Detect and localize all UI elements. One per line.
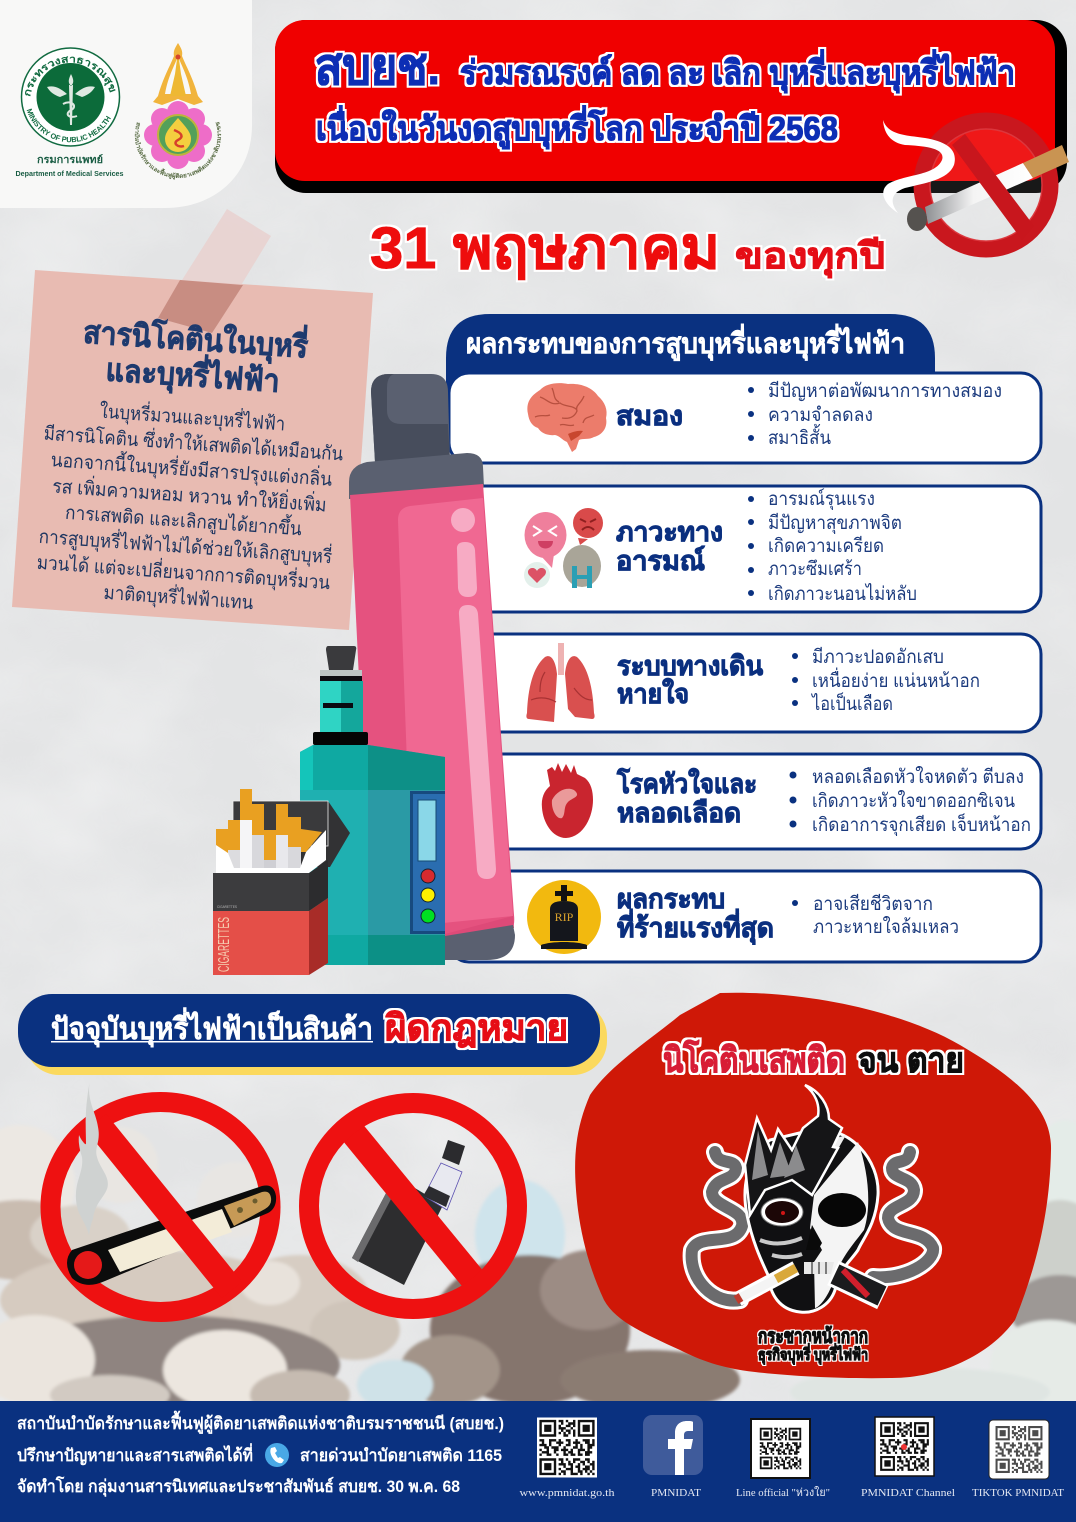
icon: no cigarette sign [50,1080,276,1312]
note body text: นอกจากนี้ในบุหรี่ยังมีสารปรุงแต่งกลิ่น [50,446,333,492]
list: emotion effects: เกิดความเครียด [768,535,884,557]
effects header tab: ผลกระทบของการสูบบุหรี่และบุหรี่ไฟฟ้า [466,323,905,361]
footer [0,1401,1076,1522]
smoke clouds [0,1120,1076,1420]
list: brain effects: สมาธิสั้น [768,424,831,449]
label: heart: โรคหัวใจและ [616,767,757,799]
label: severe: ที่ร้ายแรงที่สุด [617,908,774,945]
label: emotions [616,517,723,576]
title banner [275,20,1067,193]
logo: Ministry of Public Health: Department of Medical Services [16,171,124,178]
PMNIDAT Channel QR code: PMNIDAT Channel [861,1487,955,1499]
icon: no vape sign [309,1103,517,1309]
website QR code: www.pmnidat.go.th [520,1487,615,1499]
Line official QR code [736,1419,830,1499]
note heading: สารนิโคตินในบุหรี่ [82,310,310,366]
Facebook link [643,1415,703,1499]
warning heading: นิโคตินเสพติด [663,1039,845,1080]
warning heading [663,1039,964,1080]
title line 2: เนื่องในวันงดสูบบุหรี่โลก ประจำปี 2568 [316,105,838,150]
tape [158,209,271,333]
note body text: การสูบบุหรี่ไฟฟ้าไม่ได้ช่วยให้เลิกสูบบุหรี่ [38,523,333,569]
note body text: มวนได้ แต่จะเปลี่ยนจากการติดบุหรี่มวน [36,549,331,595]
card: most severe effect [449,871,1041,962]
title line 1: ร่วมรณรงค์ ลด ละ เลิก บุหรี่และบุหรี่ไฟฟ้า [460,49,1015,94]
list: heart effects: เกิดภาวะหัวใจขาดออกซิเจน [812,790,1015,812]
list: heart effects [790,766,1031,837]
panel: nicotine warning [575,993,1051,1378]
law banner: ปัจจุบันบุหรี่ไฟฟ้าเป็นสินค้า [51,1007,373,1048]
note body text: รส เพิ่มความหอม หวาน ทำให้ยิ่งเพิ่ม [51,472,328,517]
skull caption: ธุรกิจบุหรี่ บุหรี่ไฟฟ้า [758,1343,868,1365]
label: brain: สมอง [616,401,683,431]
website QR code [520,1418,615,1499]
footer contact text: สถาบันบำบัดรักษาและฟื้นฟูผู้ติดยาเสพติดแห่งชาติบรมราชชนนี (สบยช.) [17,1410,504,1435]
footer contact text [17,1410,504,1497]
icon: lungs [526,643,595,722]
list: severe effects [792,893,959,938]
illustration: cigarette pack [213,789,350,975]
card: emotions [449,486,1041,612]
TikTok QR code: TIKTOK PMNIDAT [972,1487,1064,1499]
left eye [761,1198,803,1226]
effects header tab [446,314,935,400]
label: emotions: ภาวะทาง [616,517,723,547]
title line 1 [315,39,1015,95]
date heading [370,216,885,281]
logo: Ministry of Public Health: กระทรวงสาธารณสุข [25,56,116,96]
list: emotion effects: เกิดภาวะนอนไม่หลับ [768,583,917,605]
smoke [692,1152,933,1301]
icon: RIP tombstone: RIP [555,910,574,924]
icon: brain [527,383,607,452]
logo: Ministry of Public Health: MINISTRY OF PUBLIC HEALTH [26,108,111,142]
illustration: cigarette pack: CIGARETTES [217,904,237,909]
note body text: ในบุหรี่มวนและบุหรี่ไฟฟ้า [99,398,286,436]
icon: emotion bubbles [524,508,603,588]
PMNIDAT Channel QR code [861,1417,955,1499]
skull head [745,1130,878,1312]
note body text: มาติดบุหรี่ไฟฟ้าแทน [103,579,254,615]
footer contact text: ปรึกษาปัญหายาและสารเสพติดได้ที่ [17,1443,253,1466]
note body text: การเสพติด และเลิกสูบได้ยากขึ้น [64,499,303,540]
law banner: ผิดกฎหมาย [385,1007,568,1048]
label: severe: ผลกระทบ [617,884,725,914]
title line 1: สบยช. [315,39,440,95]
label: heart [616,767,757,828]
footer contact text: สายด่วนบำบัดยาเสพติด 1165 [300,1446,502,1465]
card: heart and blood vessels [449,754,1041,849]
list: severe effects: ภาวะหายใจล้มเหลว [813,916,959,938]
list: emotion effects [748,488,917,605]
skull caption [758,1325,868,1365]
note heading: และบุหรี่ไฟฟ้า [105,347,281,401]
list: brain effects: ความจำลดลง [768,405,873,426]
Facebook link: PMNIDAT [651,1487,701,1499]
TikTok QR code [972,1420,1064,1499]
illustration: pink disposable vape [349,374,515,960]
law banner [18,994,607,1075]
label: respiratory: หายใจ [617,678,689,709]
Line official QR code: Line official "ห่วงใย" [736,1486,830,1499]
control panel [410,791,445,934]
hair [745,1085,842,1215]
panel: effects of smoking [446,314,1041,962]
list: severe effects: อาจเสียชีวิตจาก [813,893,933,915]
list: respiratory effects: ไอเป็นเลือด [810,691,893,715]
label: respiratory: ระบบทางเดิน [617,651,764,681]
cigarette [67,1185,276,1285]
list: respiratory effects: มีภาวะปอดอักเสบ [812,646,944,668]
label: heart: หลอดเลือด [617,798,741,828]
illustration: skull with smoke [692,1085,933,1312]
illustration: teal box mod vape [300,646,445,965]
label: respiratory [617,651,764,709]
skull caption: กระชากหน้ากาก [758,1325,868,1348]
list: emotion effects: ภาวะซึมเศร้า [768,559,862,580]
cigarette [738,1268,796,1299]
list: emotion effects: มีปัญหาสุขภาพจิต [768,512,902,535]
icon: phone [265,1443,289,1467]
note body text [36,398,344,615]
footer contact text: จัดทำโดย กลุ่มงานสารนิเทศและประชาสัมพันธ์ สบยช. 30 พ.ค. 68 [17,1476,460,1497]
list: brain effects [748,380,1002,449]
card: brain [449,373,1041,463]
label: emotions: อารมณ์ [616,545,705,576]
list: heart effects: เกิดอาการจุกเสียด เจ็บหน้าอก [812,812,1031,837]
note body text: มีสารนิโคติน ซึ่งทำให้เสพติดได้เหมือนกัน [43,420,344,465]
list: heart effects: หลอดเลือดหัวใจหดตัว ตีบลง [812,766,1024,788]
note heading [82,310,310,401]
logo panel [0,0,252,208]
logo: Ministry of Public Health [16,47,124,178]
warning heading: จน ตาย [858,1041,964,1080]
illustration: cigarette pack: CIGARETTES [216,917,233,972]
logo: Ministry of Public Health: กรมการแพทย์ [37,154,103,166]
list: brain effects: มีปัญหาต่อพัฒนาการทางสมอง [768,380,1002,402]
date heading: 31 พฤษภาคม [370,216,720,281]
label: severe [617,884,774,945]
list: respiratory effects: เหนื่อยง่าย แน่นหน้าอก [812,667,980,692]
smoke [76,1080,108,1235]
icon: heart [542,763,593,838]
mini vape [833,1273,883,1297]
logo: PMNIDAT institute [134,43,222,180]
date heading: ของทุกปี [735,235,885,279]
right skull half [810,1142,868,1308]
list: emotion effects: อารมณ์รุนแรง [768,488,875,511]
card: respiratory system [449,634,1041,732]
panel: nicotine note [12,209,373,630]
icon: no smoking sign on banner [883,120,1069,249]
icon: RIP tombstone [527,880,601,954]
list: respiratory effects [792,646,980,715]
cigarettes [216,789,322,870]
